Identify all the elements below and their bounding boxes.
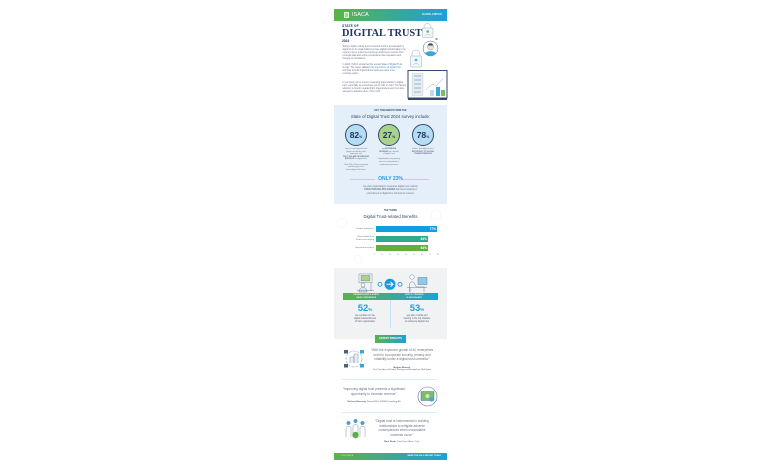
quote text: “Improving digital trust presents a significant [343,387,405,391]
stat 53% text: training is the top obstacle [404,318,430,320]
stat 53%: 53% [410,303,424,314]
axis labels: 0 [374,254,375,256]
stat circle 27%: 27% [383,130,395,140]
caption 82%: Only 34% of those surveyed [344,164,368,166]
quote text: incidents occur.” [390,433,414,437]
quote text: reliability under a digital trust umbrella.” [374,357,430,361]
panel: key takeaways [334,105,447,204]
bar label: right [405,294,424,299]
icon: worker with screen [357,274,374,292]
caption 27%: of digital trust. [383,153,395,155]
quote text: relationships to mitigate adverse [379,424,425,428]
bar: product experience: 77% [430,227,436,231]
bar label: left: HAVE CONFIDENCE [356,297,376,299]
intro paragraph 3 [342,81,406,93]
intro paragraph 3: trust, especially as enterprises put AI risks on hold. The fastest [342,85,406,87]
caption 82%: BUDGETS for digital trust. [345,158,367,160]
bar chart [355,226,439,256]
caption 27%: REVENUE as a benefit [379,151,399,153]
footer left text: © 2024 ISACA [340,455,353,457]
axis labels: 50 [413,254,415,256]
bar: data breaches [376,236,428,242]
bar: innovation: 64% [421,246,427,250]
panel: readiness comparison [334,268,447,338]
footer band [334,452,447,460]
icon: person at desk [407,274,428,292]
callout text: commitment to digital trust will lead to success. [367,193,414,195]
button: expert insights [375,335,406,342]
intro paragraph 1: Today's highly mobile and connected world is accelerated by [342,46,404,48]
bar label: left: RESEARCHERS & EXECS [353,294,379,296]
caption 27%: returns on investment in [379,161,399,163]
callout text: EVEN THOUGH 85% AGREE that demonstrating a [364,189,417,191]
header band [334,9,447,21]
quote attribution: Vice President of Product Strategy and Evangelism, RiskOptics [373,369,431,371]
callout text: say their organization's measures digital trust maturity [363,186,418,188]
quote attribution: Mark Silvak, Chief Tech Officer, CsQ+ [384,440,420,442]
intro paragraph 1 [342,45,406,60]
panel kicker: KEY TAKEAWAYS FROM THE [374,110,407,112]
caption 82%: digital trust will be most [346,151,366,153]
stat 52% text: of their organization [355,321,375,323]
caption 82% [343,148,369,171]
icon: team with shield [346,419,366,438]
caption 82%: important with [350,153,362,155]
icon: person avatar [423,38,438,56]
panel heading: State of Digital Trust 2024 survey include: [351,114,430,119]
stat 52% text: digital trustworthiness [354,318,376,320]
main title: DIGITAL TRUST [342,28,422,39]
axis labels: 40 [405,254,407,256]
stat 53% text: to achieving digital trust [405,321,429,323]
quote 1 [344,348,433,371]
intro paragraph 1: urgency lies in ensuring employees and buyers receive their [342,52,404,54]
title kicker: STATE OF [342,24,359,28]
stat 52%: 52% [358,303,372,314]
intro paragraph 2 [342,63,402,75]
intro paragraph 2: survey. The report validates the importance of digital trust [342,67,401,69]
intro paragraph 2: In 2024, ISACA conducted the annual State of Digital Trust [342,64,402,66]
icon: network building [344,350,364,368]
bar label 2: More reliable data [357,236,374,238]
quote attribution: Meghan Maneval, [393,366,411,368]
icon: money cycle [418,386,438,406]
intro paragraph 2: evolving region. [342,73,359,75]
gradient label bar [343,293,438,300]
caption 27%: say INCREASED [382,148,396,150]
footer right text: READ THE FULL REPORT TODAY [408,455,441,457]
axis labels: 60 [421,254,423,256]
axis labels: 10 [381,254,383,256]
caption 78%: TRANSFORMATION [414,153,432,155]
axis labels: 30 [397,254,399,256]
stat 53% text [404,314,430,323]
chart title: Digital Trust-related Benefits [364,214,417,218]
ISACA wordmark: ISACA [352,12,369,18]
bar label: right: SKILLS, TRAINING [405,294,423,296]
quote text [343,387,406,396]
vertical divider [390,300,391,328]
quote 3 [346,419,429,442]
bar: innovation [376,245,428,251]
ISACA logo mark [344,12,349,18]
intro paragraph 3: relevant to advance them. Here is 62. [342,91,381,93]
title year: 2024 [342,39,349,43]
bar: data breaches: 64% [421,237,427,241]
axis labels [374,254,439,256]
icon: padlock person top [422,24,433,38]
intro text [342,45,406,93]
quote attribution [372,366,431,371]
caption 27%: Organizations see growing [378,158,400,160]
caption 78%: believe that digital trust is [412,148,434,150]
caption 78% [412,148,434,155]
axis labels: 80 [437,254,439,256]
callout: only 23%: ONLY 23% [378,176,403,182]
bar label: right: IS NECESSARY [406,297,422,299]
quote text: need to incorporate security, privacy and [373,353,431,357]
bar: product experience [376,226,437,232]
caption 82%: say it's very important that [345,148,367,150]
caption 82%: technologies the future. [346,169,366,171]
quote text: “With the explosive growth of AI, enterprises [371,348,433,352]
quote text: “Digital trust is instrumental in building [375,419,429,423]
edition label: GLOBAL EDITION [422,14,442,16]
quote 2 [343,386,438,406]
intro paragraph 1: personal data and online interactions have reputation and [342,55,401,57]
quote text [371,348,433,361]
stat circle 27% [378,124,400,146]
bar label: left [353,294,379,299]
button: expert insights: EXPERT INSIGHTS [379,337,402,340]
bar label 2 [356,236,374,241]
quote attribution: Rolf von Roessing, Partner/FGS, FORFA Consulting AG [348,400,400,402]
bar label 1: Product experience [356,228,374,230]
chart heading [364,209,418,219]
intro paragraph 1: integrity in compliance. [342,58,366,60]
icon: monitor dashboard [408,70,447,100]
intro paragraph 2: and how to build organizations and keep pace in an [342,70,395,72]
quote text [375,419,429,437]
stat 52% text: are confident in the [355,315,375,317]
axis labels: 20 [389,254,391,256]
bar label 2: for decision-making [356,239,374,241]
stat circle 78%: 78% [417,130,429,140]
quote text: consequences when unavoidable [378,428,426,432]
stat 53% text: say lack of skills and [407,315,427,317]
caption 27% [378,148,400,166]
callout text [363,185,418,195]
stat circle 82%: 82% [350,130,362,140]
intro paragraph 1: digital trust. As organizations pursue digital transformation, the [342,49,406,51]
caption 78%: IMPORTANT TO DIGITAL [412,151,434,153]
caption 27%: continuing experience. [380,164,398,166]
title block [342,24,422,43]
caption 82%: ONLY 36% ARE INCREASING [343,156,369,158]
intro paragraph 3: adoption is found in leadership's organizations and the future [342,88,404,90]
stat 52% text [354,314,376,323]
icon: arrow connector [378,278,402,290]
axis labels: 70 [429,254,431,256]
icon: padlock person lower [410,50,422,67]
stat circle 78% [412,124,434,146]
stat circle 82% [345,124,367,146]
quote text: opportunity to increase revenue.” [351,392,397,396]
intro paragraph 3: In our study, we've survey measuring gaps relative to digital [342,82,403,84]
chart kicker: THE THREE [384,210,397,212]
caption 82%: said they give their [348,166,364,168]
bar label 3: Improved innovation [355,246,374,248]
